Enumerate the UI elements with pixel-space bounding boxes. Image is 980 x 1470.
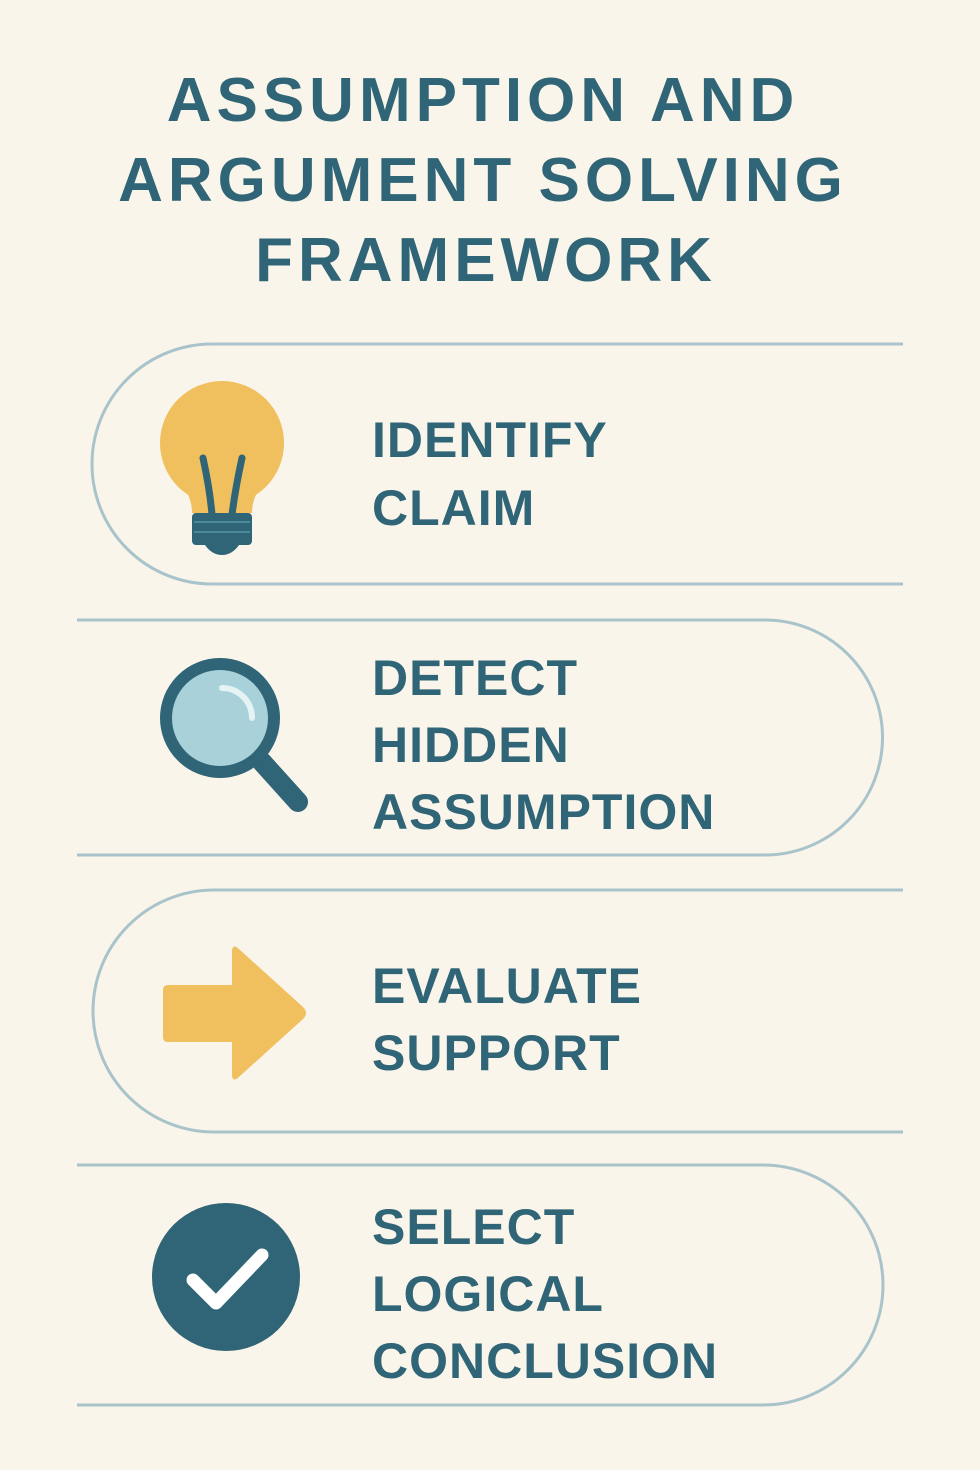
text: select logical conclusion <box>372 1199 718 1389</box>
text: detect hidden assumption: DETECT <box>372 650 578 706</box>
panel: evaluate support <box>93 890 903 1132</box>
text: select logical conclusion: SELECT <box>372 1199 575 1255</box>
text: evaluate support: SUPPORT <box>372 1025 621 1081</box>
icon: light bulb <box>160 381 284 555</box>
text: identify claim: CLAIM <box>372 480 535 536</box>
text: evaluate support <box>372 958 642 1081</box>
panel: select logical conclusion <box>77 1165 883 1405</box>
text: identify claim <box>372 412 608 536</box>
title <box>118 66 848 295</box>
text: select logical conclusion: LOGICAL <box>372 1266 604 1322</box>
title: ARGUMENT SOLVING <box>118 146 848 215</box>
text: detect hidden assumption: HIDDEN <box>372 717 570 773</box>
text: detect hidden assumption: ASSUMPTION <box>372 784 715 840</box>
text: detect hidden assumption <box>372 650 715 840</box>
title: FRAMEWORK <box>255 226 717 295</box>
panel: detect hidden assumption <box>77 620 882 855</box>
title: ASSUMPTION AND <box>167 66 799 135</box>
icon: arrow <box>163 946 306 1080</box>
icon: magnifier <box>166 664 298 802</box>
panel: identify claim <box>92 344 903 584</box>
text: identify claim: IDENTIFY <box>372 412 608 468</box>
icon: check circle <box>152 1203 300 1351</box>
text: select logical conclusion: CONCLUSION <box>372 1333 718 1389</box>
text: evaluate support: EVALUATE <box>372 958 642 1014</box>
